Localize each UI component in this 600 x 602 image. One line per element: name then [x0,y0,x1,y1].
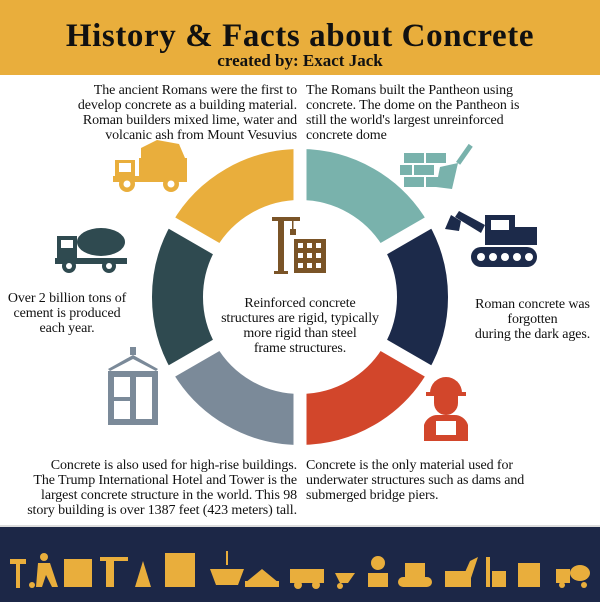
text: high-rise [27,458,297,518]
icon: center crane building [272,217,326,274]
text: ancient Romans: develop concrete as a building material. [78,98,297,113]
text: dark ages: Roman concrete was [475,297,590,312]
text: Pantheon: concrete. The dome on the Pantheon is [306,98,519,113]
text: high-rise: largest concrete structure in the world. This 98 [41,488,297,503]
text: underwater: submerged bridge piers. [306,488,438,503]
text: center reinforced: more rigid than steel [243,326,357,341]
text: ancient Romans: Roman builders mixed lime, water and [83,113,297,128]
title: History & Facts about Concrete [66,18,534,54]
text: underwater: underwater structures such as dams and [306,473,524,488]
icon: dump truck [113,140,187,192]
icon: worker [424,377,468,441]
text: ancient Romans: The ancient Romans were the first to [94,83,297,98]
text: center reinforced: structures are rigid, typically [221,311,379,326]
header band [0,0,600,75]
subtitle: created by: Exact Jack [217,51,383,70]
icon: excavator [445,211,537,267]
text: center reinforced: frame structures. [254,341,346,356]
icon: hanging window [108,347,158,425]
footer icons [10,551,590,589]
icon: bricks and trowel [400,144,473,189]
text: dark ages [475,297,590,342]
text: high-rise: The Trump International Hotel and Tower is the [33,473,297,488]
text: 2 billion tons: Over 2 billion tons of [8,291,126,306]
text: center reinforced: Reinforced concrete [244,296,356,311]
text: high-rise: story building is over 1387 feet (423 meters) tall. [27,503,297,518]
text: dark ages: forgotten [507,312,558,327]
footer band [0,525,600,602]
text: Pantheon [306,83,519,143]
text: Pantheon: The Romans built the Pantheon using [306,83,513,98]
text: ancient Romans [78,83,297,143]
text: center reinforced [221,296,379,356]
text: underwater: Concrete is the only material used for [306,458,513,473]
text: Pantheon: still the world's largest unreinforced [306,113,504,128]
icon: mixer truck [55,228,127,273]
text: high-rise: Concrete is also used for high-rise buildings. [51,458,297,473]
text: 2 billion tons: each year. [40,321,94,336]
text: 2 billion tons: cement is produced [13,306,121,321]
text: 2 billion tons [8,291,126,336]
text: ancient Romans: volcanic ash from Mount Vesuvius [105,128,297,143]
text: dark ages: during the dark ages. [475,327,590,342]
text: underwater [306,458,524,503]
text: Pantheon: concrete dome [306,128,387,143]
